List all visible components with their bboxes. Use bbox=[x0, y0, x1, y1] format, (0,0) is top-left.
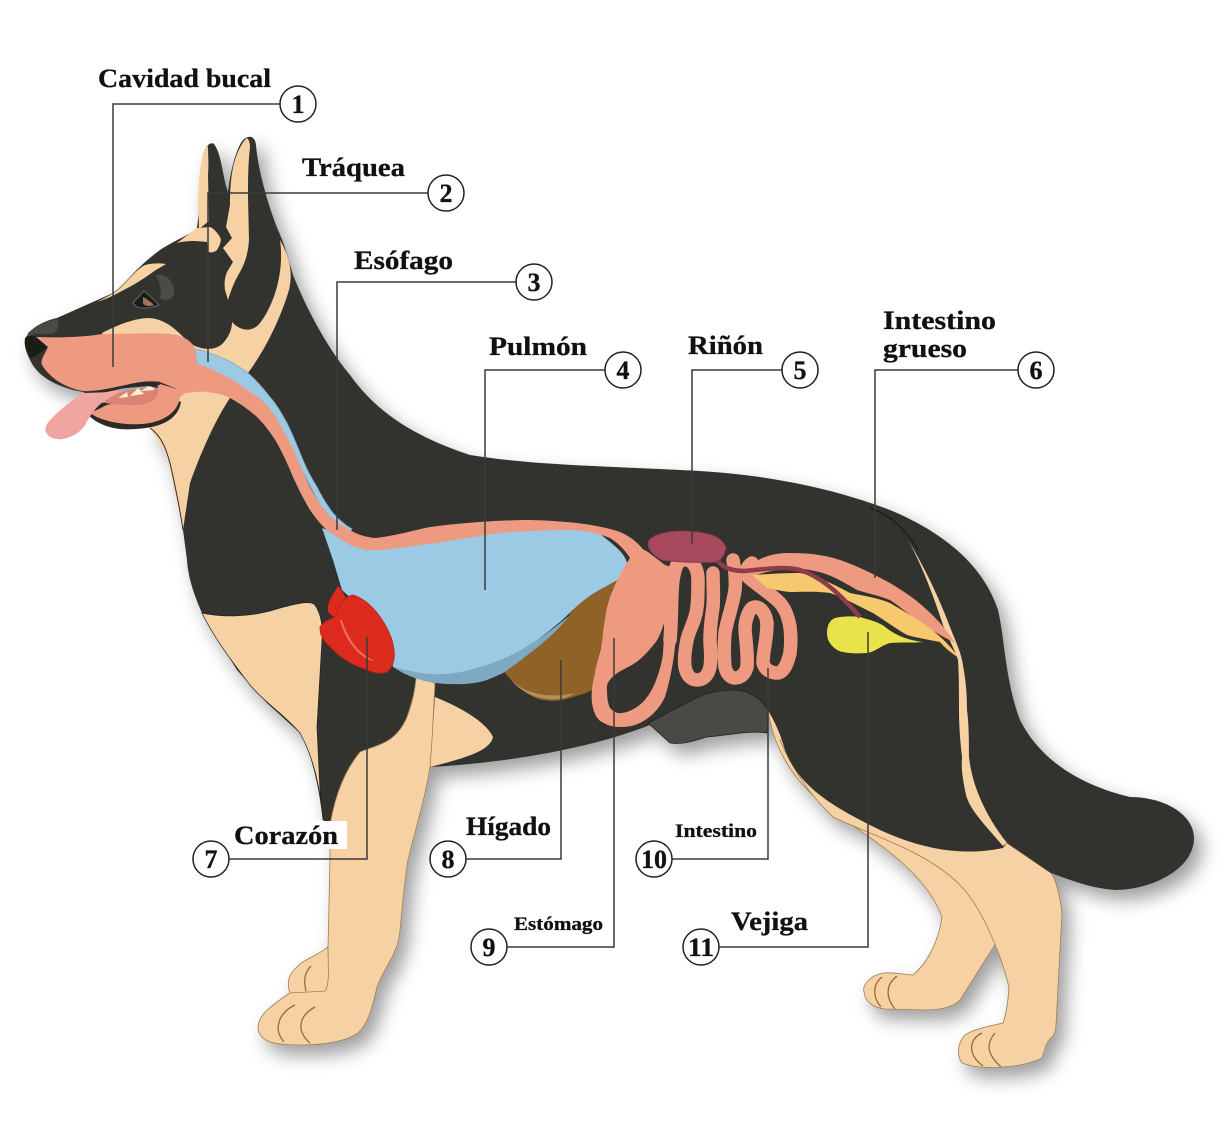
bladder bbox=[827, 616, 923, 653]
white label patch bbox=[229, 821, 347, 849]
large intestine bbox=[748, 553, 955, 643]
lung lower edge bbox=[393, 615, 570, 684]
callout 7: Corazón: 7 bbox=[204, 845, 218, 874]
tan at ear base bbox=[177, 227, 221, 252]
ear two inner bbox=[223, 138, 250, 300]
throat outline bbox=[150, 428, 183, 530]
callout 8: Hígado: 8 bbox=[442, 845, 454, 874]
rectum bbox=[752, 573, 959, 658]
callout 5: Riñón: 5 bbox=[794, 356, 806, 385]
teeth bbox=[118, 385, 155, 398]
callout 6: Intestino grueso: Intestino bbox=[883, 306, 996, 335]
ear one inner bbox=[198, 146, 209, 229]
intestine bbox=[670, 560, 791, 680]
flank stripe bbox=[908, 540, 1007, 846]
callout 9: Estómago: Estómago bbox=[514, 914, 603, 935]
black coat silhouette bbox=[25, 137, 1194, 890]
callout 1: Cavidad bucal: Cavidad bucal bbox=[98, 64, 271, 93]
tan elbow bbox=[430, 697, 493, 767]
callout 1: Cavidad bucal bbox=[98, 64, 316, 367]
grey belly flap bbox=[648, 690, 768, 743]
callout 8: Hígado: Hígado bbox=[466, 812, 551, 841]
lip line bbox=[83, 381, 158, 395]
dog illustration bbox=[25, 137, 1194, 1068]
far hind leg bbox=[767, 705, 998, 1010]
liver bbox=[505, 558, 632, 701]
callout 5: Riñón bbox=[688, 331, 818, 544]
near hind leg bbox=[780, 740, 1062, 1068]
lower jaw rim bbox=[85, 392, 181, 429]
callout 9: Estómago bbox=[471, 638, 614, 965]
stomach inner gap bbox=[607, 623, 664, 713]
callout 6: Intestino grueso bbox=[875, 306, 1054, 578]
lower mouth interior bbox=[105, 388, 158, 405]
callout 7: Corazón: Corazón bbox=[234, 821, 339, 850]
lower jaw bbox=[90, 384, 187, 424]
eye bbox=[133, 291, 159, 308]
nose bbox=[25, 336, 48, 358]
kidney bbox=[648, 531, 726, 562]
callout 9: Estómago: 9 bbox=[482, 933, 496, 962]
callout 7: Corazón bbox=[193, 637, 367, 877]
tongue front bbox=[45, 392, 119, 439]
callout 10: Intestino: 10 bbox=[641, 845, 667, 874]
callout 3: Esófago bbox=[337, 246, 552, 530]
toe lines bbox=[278, 966, 1001, 1067]
trachea bbox=[195, 349, 352, 538]
callout 6: Intestino grueso: grueso bbox=[883, 334, 967, 363]
tan chest bbox=[202, 603, 323, 820]
rear front paw bbox=[288, 945, 330, 995]
upper muzzle and oesophagus bbox=[36, 333, 648, 558]
front leg bbox=[258, 677, 435, 1045]
muzzle highlight bbox=[27, 319, 58, 338]
flank hairline bbox=[870, 508, 918, 550]
brow folds bbox=[155, 274, 174, 300]
callout 4: Pulmón: Pulmón bbox=[489, 332, 588, 361]
heart bbox=[320, 586, 394, 673]
tongue bbox=[45, 390, 125, 439]
callout 3: Esófago: 3 bbox=[528, 268, 540, 297]
ureter bbox=[717, 560, 860, 617]
callout 10: Intestino: Intestino bbox=[675, 821, 757, 842]
callout 2: Tráquea: 2 bbox=[440, 179, 452, 208]
callout 2: Tráquea: Tráquea bbox=[302, 153, 405, 182]
callout 4: Pulmón: 4 bbox=[616, 356, 630, 385]
callout 2: Tráquea bbox=[208, 153, 464, 362]
tan neck and cheek bbox=[102, 240, 291, 530]
callout 5: Riñón: Riñón bbox=[688, 331, 764, 360]
callout 11: Vejiga: 11 bbox=[688, 933, 714, 962]
lung bbox=[322, 526, 627, 684]
callout 6: Intestino grueso: 6 bbox=[1030, 356, 1042, 385]
callout 1: Cavidad bucal: 1 bbox=[292, 90, 304, 119]
callout 8: Hígado bbox=[430, 660, 561, 877]
dog body with shadow bbox=[25, 137, 1194, 1068]
mouth and throat bbox=[36, 333, 648, 558]
callout 10: Intestino bbox=[636, 668, 768, 877]
callout 4: Pulmón bbox=[485, 332, 641, 590]
stomach and hook bbox=[592, 545, 680, 727]
callout 11: Vejiga: Vejiga bbox=[731, 907, 808, 936]
callout 3: Esófago: Esófago bbox=[354, 246, 453, 275]
tan stripe on head bbox=[97, 263, 166, 302]
callout 11: Vejiga bbox=[683, 632, 868, 965]
